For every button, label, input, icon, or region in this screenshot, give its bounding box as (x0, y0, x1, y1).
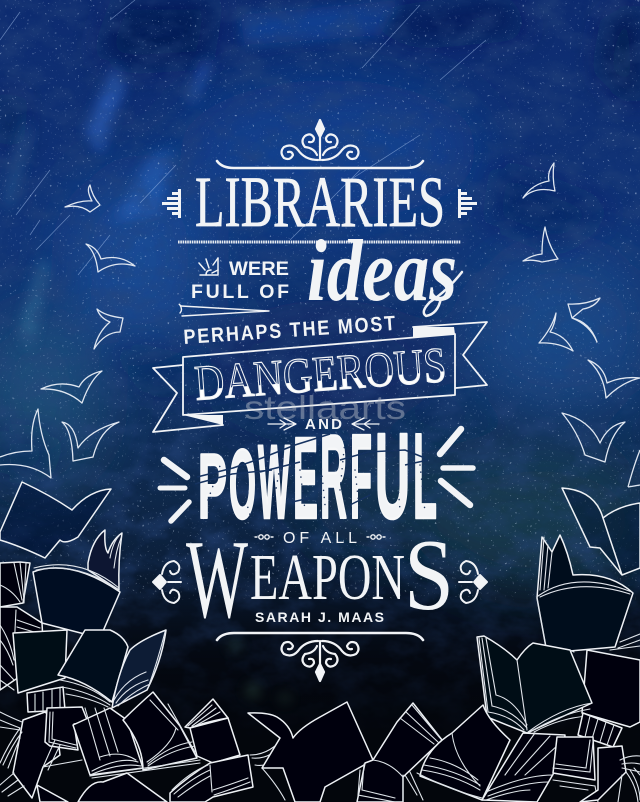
left stack of flying books (0, 482, 286, 802)
right book: square block (582, 650, 640, 727)
right bird 5 (588, 360, 640, 398)
watermark: stellaarts (244, 389, 406, 426)
right bird 6 (562, 413, 625, 462)
centre bottom book (248, 702, 373, 802)
power word: powerful: W (258, 424, 290, 541)
right book: rear block (553, 737, 598, 802)
stripes right of libraries (458, 189, 477, 218)
title word: weapons: W (186, 518, 248, 642)
power word: powerful: O (229, 429, 256, 539)
left book: open upper (0, 482, 111, 558)
scroll ornament left (153, 561, 181, 603)
right bird 1 (523, 163, 555, 198)
title word: weapons: EAPON (250, 541, 405, 614)
small knot ornament left (255, 535, 273, 539)
left bird 6 (0, 409, 51, 478)
text: full of: FULL OF (191, 281, 289, 303)
bottom flourish (217, 633, 423, 681)
power word: powerful: P (198, 436, 227, 538)
small knot ornament right (367, 535, 385, 539)
power word: powerful: U (375, 408, 410, 544)
rays left of powerful (160, 460, 189, 521)
dotted divider (178, 240, 461, 244)
right bird 7 (628, 450, 640, 487)
right book: page stripes (578, 713, 622, 747)
text: of all: OF ALL (283, 530, 357, 547)
speckles on powerful (208, 440, 425, 515)
left bird 5 (62, 422, 119, 461)
script word: ideas: ideas (307, 223, 457, 320)
bottom left remnants (78, 773, 167, 802)
scroll ornament right (459, 561, 487, 603)
left book: square block (13, 630, 67, 693)
text: perhaps the most: PERHAPS THE MOST (183, 312, 396, 349)
right bird 4 (539, 313, 573, 351)
text: were: WERE (229, 258, 289, 280)
bottom book: lower open (170, 735, 286, 802)
bottom book: large open (73, 692, 200, 778)
right book: open with page edges (477, 636, 592, 733)
left bird 1 (65, 185, 100, 212)
title word: libraries: LIBRARIES (195, 162, 445, 242)
quote lettering: L (413, 408, 437, 544)
title word: weapons: S (404, 519, 454, 632)
left book: tilted cover (33, 530, 122, 638)
text: and: AND (305, 416, 342, 433)
needle ornament (179, 304, 269, 316)
cracks through powerful (195, 434, 428, 505)
sunburst ornament (199, 258, 218, 275)
left bird 2 (86, 244, 135, 272)
power word: powerful: E (293, 413, 318, 543)
stripes left of libraries (162, 189, 181, 218)
left book: open with pages (58, 630, 166, 708)
text: author: SARAH J. MAAS (255, 609, 384, 625)
rays right of powerful (440, 429, 473, 505)
arrow right of and (352, 418, 379, 430)
power word: powerful: F (350, 410, 372, 544)
bottom book: right neighbour (185, 699, 240, 763)
left bird 3 (94, 309, 123, 349)
lower left cluster (0, 707, 88, 802)
power word: powerful: R (320, 410, 347, 544)
ribbon banner (153, 322, 487, 432)
right bird 3 (568, 298, 600, 342)
top flourish (217, 120, 423, 168)
right book: tilted cover (537, 535, 633, 653)
right cluster: dark polygon (580, 746, 640, 802)
right stack of flying books (357, 488, 640, 802)
quote lettering (153, 120, 487, 681)
right book: near centre (357, 703, 442, 802)
paper birds flying upward (0, 163, 640, 487)
banner word: dangerous: DANGEROUS (193, 336, 448, 411)
left book: page stripes (27, 687, 65, 712)
arrow left of and (268, 418, 296, 430)
right book: bottom large open (405, 705, 565, 802)
right bird 2 (523, 227, 558, 262)
right book: open upper (562, 488, 640, 575)
left bird 4 (41, 371, 102, 403)
left book: edge fan (0, 562, 44, 690)
